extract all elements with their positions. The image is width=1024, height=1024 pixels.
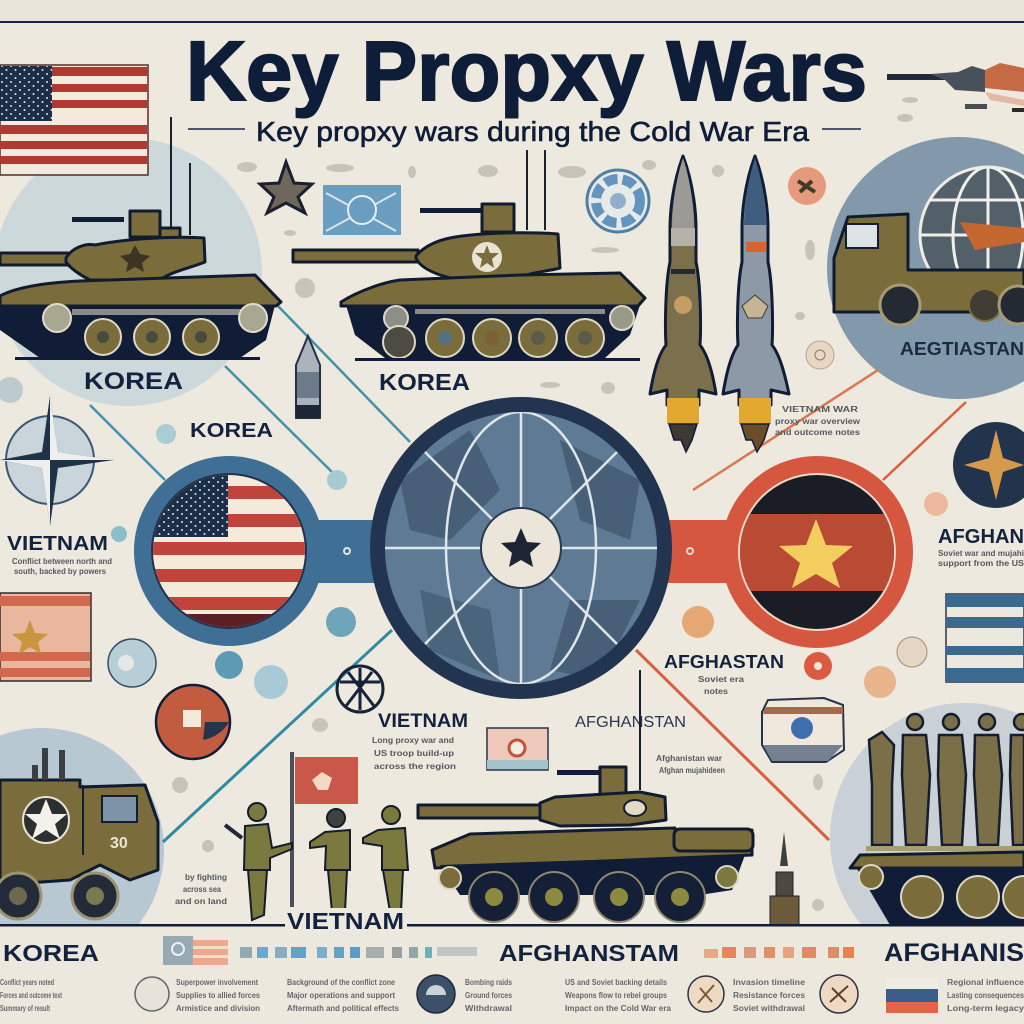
text block: Vietnam centre: US troop build-up xyxy=(374,749,454,758)
flag and soldiers xyxy=(225,752,408,920)
footer text columns: Soviet withdrawal xyxy=(733,1004,805,1013)
flag: Vietnam small left xyxy=(0,593,91,681)
label: Korea centre: KOREA xyxy=(379,369,470,395)
text block: Vietnam left xyxy=(12,557,112,576)
subtitle: Key propxy wars during the Cold War Era xyxy=(256,116,809,147)
central globe xyxy=(370,397,672,699)
label: Vietnam centre: VIETNAM xyxy=(378,711,468,732)
footer text columns: Bombing raids xyxy=(465,978,512,987)
footer text columns: Major operations and support xyxy=(287,991,395,1000)
text block: Afghanistan centre: Afghan mujahideen xyxy=(659,766,725,775)
footer text columns: Invasion timeline xyxy=(733,978,806,987)
footer progress dots blue xyxy=(240,947,477,958)
footer label: Afghanistan right: AFGHANIS xyxy=(884,939,1024,967)
footer text columns: Background of the conflict zone xyxy=(287,978,395,987)
missile: right xyxy=(723,156,789,452)
text block: Afghanistan right: Soviet war and mujahi xyxy=(938,549,1024,558)
circle backdrop: top left xyxy=(0,138,262,406)
text block: truck note xyxy=(175,873,227,906)
text block: Vietnam left: Conflict between north and xyxy=(12,557,112,566)
label: Afghanistan upper: AFGHASTAN xyxy=(664,652,784,672)
label: Afghanistan centre: AFGHANSTAN xyxy=(575,714,686,731)
icon: bronze star xyxy=(260,162,312,213)
footer text columns: Long-term legacy xyxy=(947,1004,1024,1013)
footer text columns xyxy=(0,978,1024,1013)
icon: monument xyxy=(770,832,799,926)
label: Afghanistan right: AFGHAN xyxy=(938,526,1024,548)
footer icon: tan coin 2 xyxy=(820,975,858,1013)
text block: upper right note: VIETNAM WAR xyxy=(782,405,858,414)
icon: small flag patch xyxy=(487,728,548,770)
label: Korea small: KOREA xyxy=(190,420,273,442)
flag: blue stripes right xyxy=(946,594,1024,682)
text block: Afghanistan upper xyxy=(698,675,745,696)
footer text columns: Regional influence xyxy=(947,978,1024,987)
text block: Vietnam centre xyxy=(372,736,456,771)
footer mini flag: tricolour xyxy=(886,978,938,1013)
tank: Afghanistan xyxy=(418,670,753,922)
icon: small coin xyxy=(806,341,834,369)
footer icon: tan coin 1 xyxy=(688,976,724,1012)
left blue node xyxy=(134,456,385,646)
tank: Korea left xyxy=(0,117,281,360)
subtitle rule left xyxy=(188,128,245,130)
footer label: Afghanistan centre: AFGHANSTAM xyxy=(499,940,679,966)
text block: Afghanistan right xyxy=(938,549,1024,568)
circle backdrop: bottom right xyxy=(830,703,1024,973)
icon: teal badge xyxy=(108,639,156,687)
label: Vietnam left: VIETNAM xyxy=(7,533,108,555)
truck: bottom left: 30 xyxy=(110,835,128,852)
footer text columns: Impact on the Cold War era xyxy=(565,1004,672,1013)
footer text columns: US and Soviet backing details xyxy=(565,978,667,987)
footer progress dots orange xyxy=(704,947,854,958)
footer label: Korea: KOREA xyxy=(3,940,99,966)
footer text columns: Summary of result xyxy=(0,1004,50,1013)
truck: bottom left xyxy=(0,748,158,919)
truck with globe xyxy=(834,165,1024,325)
text block: upper right note xyxy=(775,405,861,437)
text block: truck note: across sea xyxy=(183,885,221,894)
right red node xyxy=(660,456,913,648)
footer text columns: Weapons flow to rebel groups xyxy=(565,991,667,1000)
label: Vietnam bottom: VIETNAM xyxy=(287,908,404,934)
footer text columns: Aftermath and political effects xyxy=(287,1004,400,1013)
text block: Vietnam left: south, backed by powers xyxy=(14,567,107,576)
text block: Vietnam centre: Long proxy war and xyxy=(372,736,454,745)
icon: small rifle top right xyxy=(887,63,1024,112)
missile: left xyxy=(650,156,716,452)
label: garbled badge: AEGTIASTAN xyxy=(900,339,1024,359)
icon: blue gear emblem xyxy=(587,170,649,232)
icon: orange badge xyxy=(788,167,826,205)
footer text columns: Supplies to allied forces xyxy=(176,991,260,1000)
subtitle rule right xyxy=(822,128,861,130)
icon: shield flag xyxy=(762,698,844,762)
small dots xyxy=(0,377,948,699)
compass: left xyxy=(0,396,114,526)
text block: upper right note: and outcome notes xyxy=(775,428,861,437)
footer text columns: Ground forces xyxy=(465,991,512,1000)
footer text columns: Superpower involvement xyxy=(176,978,258,987)
footer icon: dark coin xyxy=(417,975,455,1013)
footer mini flag xyxy=(163,936,228,965)
circle backdrop: bottom left xyxy=(0,728,164,972)
text block: Afghanistan right: support from the US xyxy=(938,559,1024,568)
text block: Afghanistan upper: notes xyxy=(704,687,729,696)
icon: star in circle xyxy=(337,666,383,712)
footer icon: grey coin xyxy=(135,977,169,1011)
footer text columns: Withdrawal xyxy=(465,1004,512,1013)
text block: truck note: and on land xyxy=(175,897,227,906)
specks: scattered faint marks xyxy=(172,97,918,911)
footer text columns: Conflict years noted xyxy=(0,978,54,987)
flag: USA top left xyxy=(0,65,148,175)
circle backdrop: top right xyxy=(827,137,1024,399)
text block: Afghanistan upper: Soviet era xyxy=(698,675,745,684)
bottom band xyxy=(0,926,1024,1024)
footer text columns: Forces and outcome text xyxy=(0,991,62,1000)
text block: Afghanistan centre xyxy=(656,754,725,775)
text block: Vietnam centre: across the region xyxy=(374,762,456,771)
icon: blue flag patch xyxy=(323,185,401,235)
footer text columns: Resistance forces xyxy=(733,991,806,1000)
text block: truck note: by fighting xyxy=(185,873,227,882)
footer text columns: Armistice and division xyxy=(176,1004,260,1013)
soldiers on tank xyxy=(850,714,1024,925)
label: Korea left: KOREA xyxy=(84,368,183,395)
icon: shell xyxy=(296,336,320,418)
tank: Korea centre xyxy=(293,150,645,361)
text block: upper right note: proxy war overview xyxy=(775,417,861,426)
text block: Afghanistan centre: Afghanistan war xyxy=(656,754,722,763)
icon: round red emblem xyxy=(156,685,230,759)
title: Key Propxy Wars xyxy=(186,24,867,118)
connector lines xyxy=(90,306,966,842)
compass: right xyxy=(953,422,1024,508)
baseline rule xyxy=(0,924,1024,926)
